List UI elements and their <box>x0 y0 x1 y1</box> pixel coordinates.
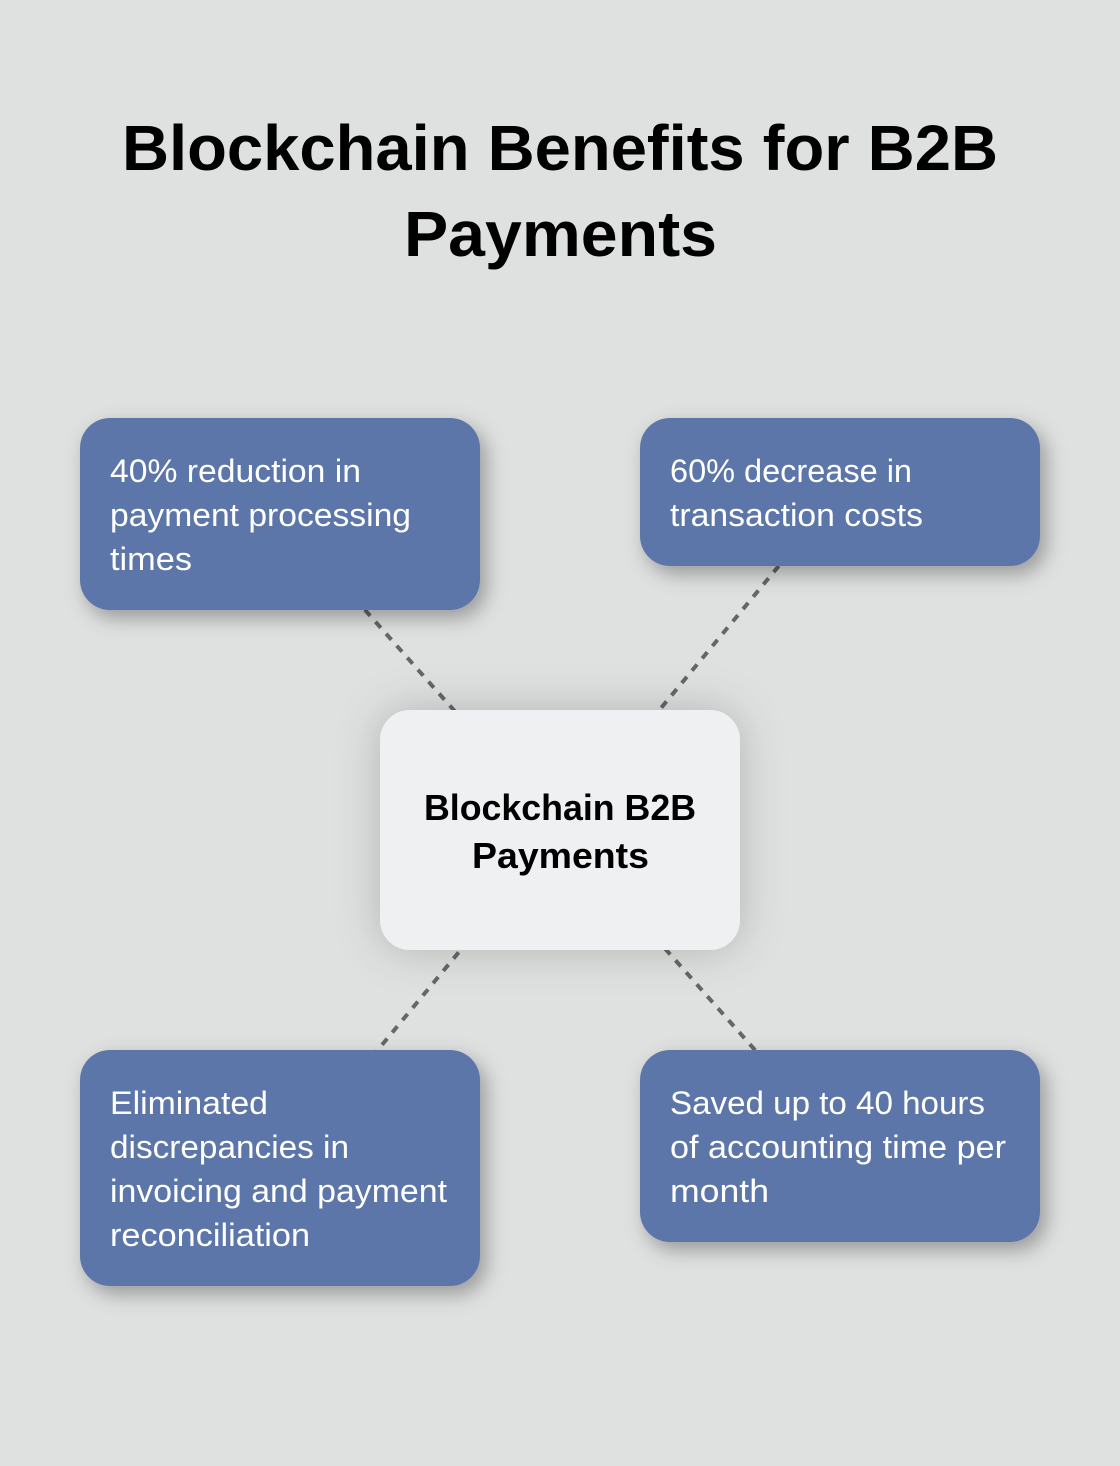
panel: accounting time: month <box>670 1173 769 1209</box>
panel: center node: Payments <box>472 835 649 876</box>
panel: transaction costs: transaction costs <box>670 497 923 533</box>
connector: top right <box>560 492 840 830</box>
title <box>122 112 998 270</box>
title: Blockchain Benefits for B2B <box>122 112 998 184</box>
connector: top left <box>280 514 560 830</box>
panel: processing times <box>80 418 480 610</box>
panel: discrepancies: invoicing and payment <box>110 1173 447 1209</box>
panel: processing times: times <box>110 541 192 577</box>
panel: transaction costs <box>640 418 1040 566</box>
panel: accounting time: Saved up to 40 hours <box>670 1085 985 1121</box>
panel: center node <box>380 710 740 950</box>
panel: processing times: payment processing <box>110 497 411 533</box>
panel: discrepancies <box>80 1050 480 1286</box>
panel: discrepancies: Eliminated <box>110 1085 268 1121</box>
title: Payments <box>404 198 717 270</box>
panel: center node: Blockchain B2B <box>424 787 696 828</box>
panel: discrepancies: reconciliation <box>110 1217 310 1253</box>
panel: discrepancies: discrepancies in <box>110 1129 349 1165</box>
connector: bottom left <box>280 830 560 1168</box>
panel: transaction costs: 60% decrease in <box>670 453 912 489</box>
connector: bottom right <box>560 830 840 1146</box>
panel: processing times: 40% reduction in <box>110 453 361 489</box>
panel: accounting time: of accounting time per <box>670 1129 1006 1165</box>
panel: accounting time <box>640 1050 1040 1242</box>
